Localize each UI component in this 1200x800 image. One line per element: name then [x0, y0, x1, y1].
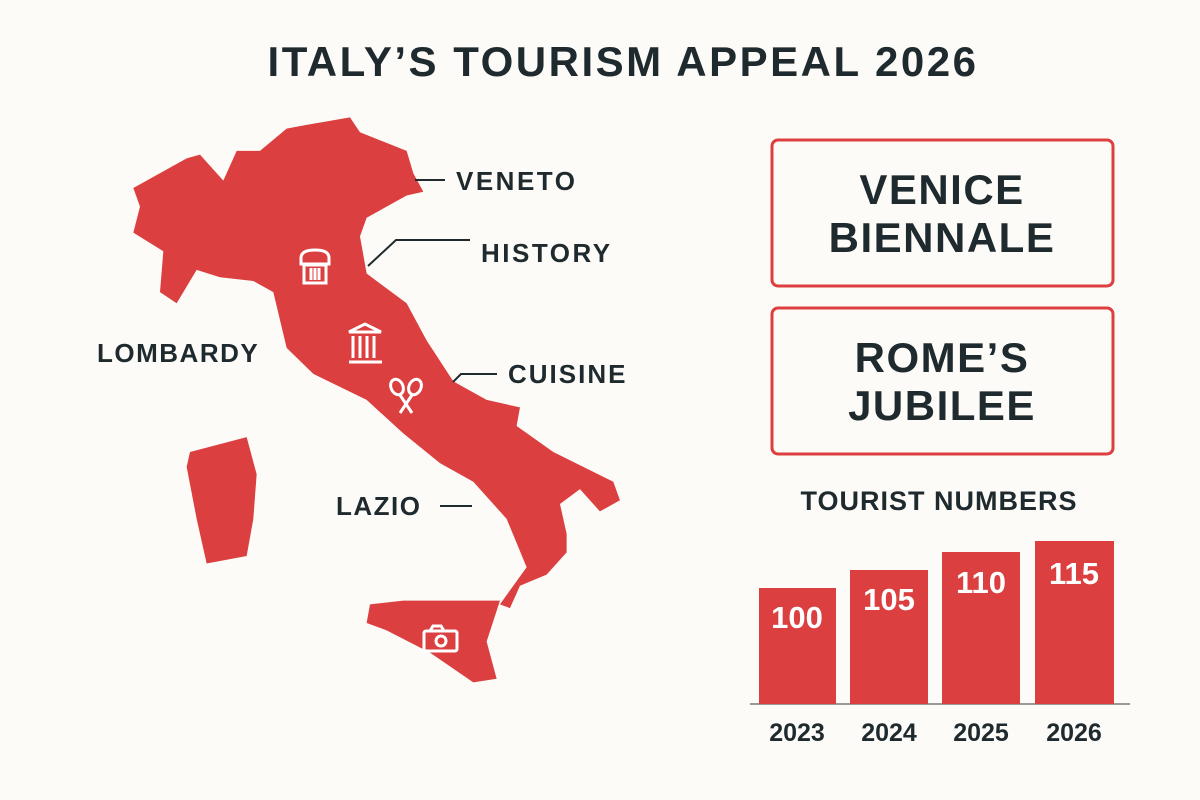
box: rome's jubilee	[772, 308, 1113, 454]
label: lazio	[336, 491, 472, 521]
bar chart: 2025	[953, 719, 1009, 747]
title: ITALY’S TOURISM APPEAL 2026	[268, 38, 978, 85]
bar chart: 110	[956, 565, 1006, 600]
bar chart: 100	[771, 600, 823, 635]
label: lazio: LAZIO	[336, 491, 422, 521]
label: veneto: VENETO	[456, 166, 577, 196]
bar chart: 2026	[1046, 719, 1102, 747]
bar chart: 2024	[861, 719, 917, 747]
icon: camera	[424, 626, 457, 651]
label: cuisine: CUISINE	[508, 359, 627, 389]
chart heading: TOURIST NUMBERS	[800, 486, 1078, 516]
bar chart	[750, 541, 1130, 747]
icon: column capital	[301, 250, 329, 283]
bar chart: 115	[1049, 556, 1099, 591]
bar chart: 2023	[769, 719, 825, 747]
box: venice biennale	[772, 140, 1113, 286]
label: cuisine	[453, 359, 627, 389]
map of Italy	[133, 117, 620, 682]
box: rome's jubilee: ROME’S	[855, 334, 1029, 381]
icon: crossed spoons	[388, 377, 424, 413]
icon: temple	[349, 324, 382, 362]
box: venice biennale: VENICE	[859, 166, 1025, 213]
bar chart: 105	[863, 582, 915, 617]
label: history	[368, 238, 613, 268]
box: venice biennale: BIENNALE	[829, 214, 1055, 261]
label: history: HISTORY	[481, 238, 613, 268]
label: lombardy: LOMBARDY	[97, 338, 259, 368]
box: rome's jubilee: JUBILEE	[848, 382, 1036, 429]
